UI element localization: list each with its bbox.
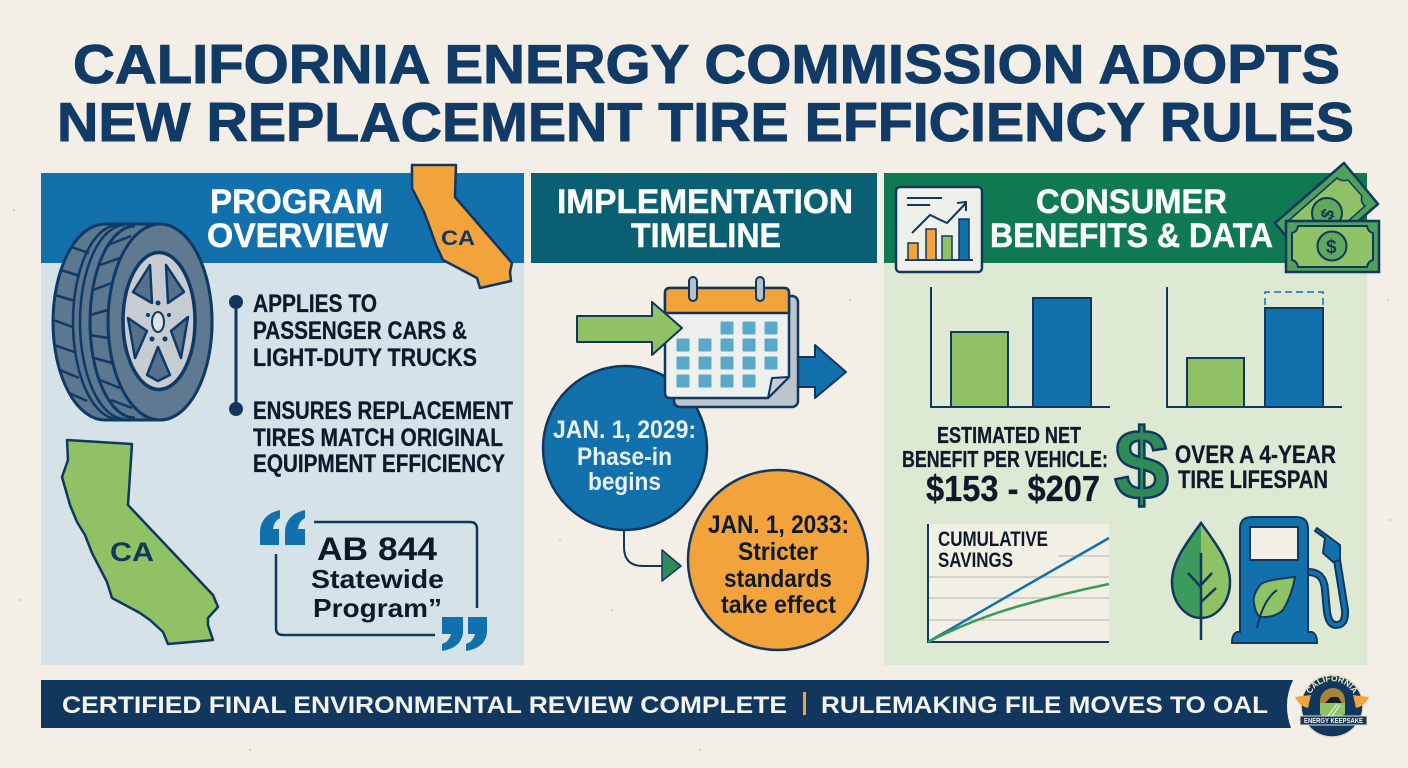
bullet: ensures replacement	[253, 397, 513, 478]
bullet: applies to: LIGHT-DUTY TRUCKS	[253, 344, 477, 372]
title: NEW REPLACEMENT TIRE EFFICIENCY RULES	[57, 91, 1354, 153]
bullet: ensures replacement: EQUIPMENT EFFICIENCY	[253, 450, 505, 478]
net benefit text: ESTIMATED NET	[937, 422, 1081, 448]
bar chart: left	[931, 287, 1110, 407]
program overview header	[41, 173, 524, 263]
orange circle: 2033: Stricter	[738, 538, 818, 566]
blue circle: 2029: JAN. 1, 2029:	[553, 416, 696, 444]
bullet connector	[229, 295, 243, 416]
panel: program overview	[41, 165, 524, 665]
bullet: applies to	[253, 290, 477, 372]
icon: tire	[53, 224, 212, 420]
bullet: ensures replacement: TIRES MATCH ORIGINAL	[253, 424, 503, 452]
timeline header: IMPLEMENTATION	[557, 183, 853, 221]
line chart: cumulative savings: SAVINGS	[938, 549, 1013, 572]
icon: green California map: CA	[110, 537, 154, 567]
badge: California seal	[1295, 674, 1369, 738]
blue circle: 2029	[543, 366, 707, 530]
consumer benefits header: CONSUMER	[1036, 183, 1227, 221]
title: CALIFORNIA ENERGY COMMISSION ADOPTS	[73, 33, 1340, 95]
bullet: applies to: PASSENGER CARS &	[253, 317, 467, 345]
footer banner: RULEMAKING FILE MOVES TO OAL	[821, 692, 1268, 719]
timeline header: TIMELINE	[631, 217, 781, 255]
icon: calendar	[665, 277, 798, 407]
orange circle: 2033: take effect	[721, 591, 837, 619]
icon: leaf	[1172, 523, 1230, 640]
quote callout: AB 844	[260, 510, 487, 651]
badge: California seal: ENERGY KEEPSAKE	[1304, 718, 1363, 725]
title	[57, 33, 1354, 153]
quote callout: AB 844: AB 844	[317, 531, 437, 567]
footer banner: CERTIFIED FINAL ENVIRONMENTAL REVIEW COMPLETE	[62, 692, 787, 719]
badge: California seal: CALIFORNIA	[1306, 676, 1357, 694]
timeline header	[531, 173, 877, 263]
icon: money bills	[1275, 163, 1379, 272]
icon: green California map	[62, 440, 218, 644]
net benefit text: $153 - $207	[926, 468, 1100, 509]
icon: orange California map	[412, 165, 512, 288]
bullet: ensures replacement: ENSURES REPLACEMENT	[253, 397, 513, 425]
lifespan text: TIRE LIFESPAN	[1178, 466, 1328, 494]
arrow: blue outgoing	[790, 345, 846, 398]
icon: orange California map: CA	[441, 227, 475, 250]
panel: implementation timeline	[531, 173, 877, 650]
net benefit text: BENEFIT PER VEHICLE:	[902, 446, 1108, 472]
orange circle: 2033: standards	[724, 565, 832, 593]
consumer benefits header	[884, 173, 1367, 263]
bar chart: right	[1167, 287, 1342, 407]
net benefit text	[902, 422, 1108, 509]
orange circle: 2033	[688, 470, 868, 650]
blue circle: 2029: begins	[588, 468, 661, 496]
line chart: cumulative savings	[928, 524, 1109, 642]
icon: money bills: $	[1326, 237, 1337, 258]
icon: dollar sign: $	[1114, 409, 1169, 521]
arrow: connector to 2033	[624, 529, 681, 581]
orange circle: 2033: JAN. 1, 2033:	[708, 511, 849, 539]
program overview header: OVERVIEW	[207, 217, 389, 255]
panel: consumer benefits and data	[884, 163, 1379, 665]
icon: money bills: $	[1316, 206, 1339, 222]
icon: growth chart	[896, 187, 982, 272]
footer banner	[41, 680, 1293, 728]
quote callout: AB 844: Statewide	[311, 564, 444, 594]
blue circle: 2029: Phase-in	[577, 443, 672, 471]
program overview header: PROGRAM	[210, 183, 383, 221]
quote callout: AB 844: Program”	[313, 593, 442, 623]
bullet: applies to: APPLIES TO	[253, 290, 377, 318]
arrow: green incoming	[577, 302, 682, 355]
line chart: cumulative savings: CUMULATIVE	[938, 528, 1048, 551]
icon: fuel pump	[1232, 517, 1345, 643]
consumer benefits header: BENEFITS & DATA	[990, 217, 1273, 255]
lifespan text: OVER A 4-YEAR	[1175, 441, 1336, 469]
lifespan text	[1175, 441, 1336, 494]
